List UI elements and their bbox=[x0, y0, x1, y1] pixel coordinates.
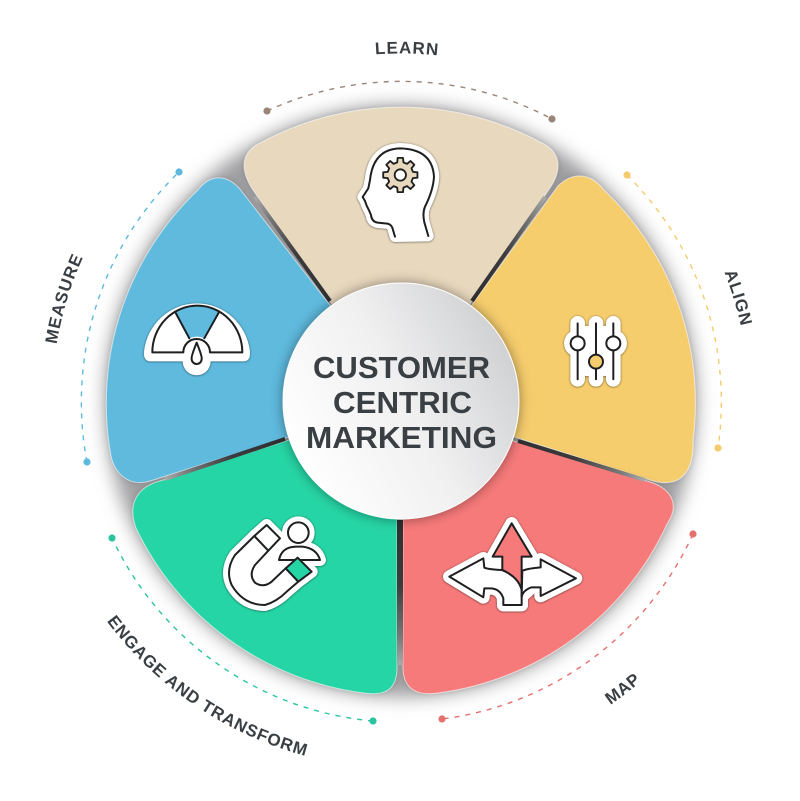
icon: head with gear bbox=[363, 148, 434, 237]
icon: speedometer gauge bbox=[144, 303, 250, 375]
dark gaps between segments bbox=[165, 197, 645, 665]
panel: map segment bbox=[403, 428, 673, 694]
title: MARKETING bbox=[306, 420, 497, 455]
label: measure: MEASURE bbox=[45, 254, 83, 344]
title: CUSTOMER bbox=[313, 350, 490, 385]
panel: learn segment bbox=[244, 107, 558, 330]
title bbox=[306, 350, 497, 455]
icon: magnet with person bbox=[229, 522, 320, 605]
icon: sliders bbox=[564, 323, 627, 379]
soft shadow ring behind the wheel bbox=[105, 105, 697, 697]
label: learn: LEARN bbox=[376, 42, 438, 56]
label: engage and transform: ENGAGE AND TRANSFORM bbox=[107, 614, 308, 756]
dashed arc: measure bbox=[81, 168, 183, 466]
icon: three way arrows bbox=[449, 523, 576, 605]
panel: measure segment bbox=[106, 178, 350, 483]
panel: align segment bbox=[450, 176, 695, 483]
label: map: MAP bbox=[604, 674, 636, 704]
dashed arc: map bbox=[438, 530, 697, 723]
center circle bbox=[283, 283, 519, 519]
title: CENTRIC bbox=[333, 385, 472, 420]
dashed arc: align bbox=[623, 171, 722, 452]
label: align: ALIGN bbox=[724, 272, 752, 325]
dashed arc: learn bbox=[263, 81, 556, 123]
dashed arc: engage and transform bbox=[108, 534, 377, 725]
panel: engage and transform segment bbox=[133, 427, 397, 694]
